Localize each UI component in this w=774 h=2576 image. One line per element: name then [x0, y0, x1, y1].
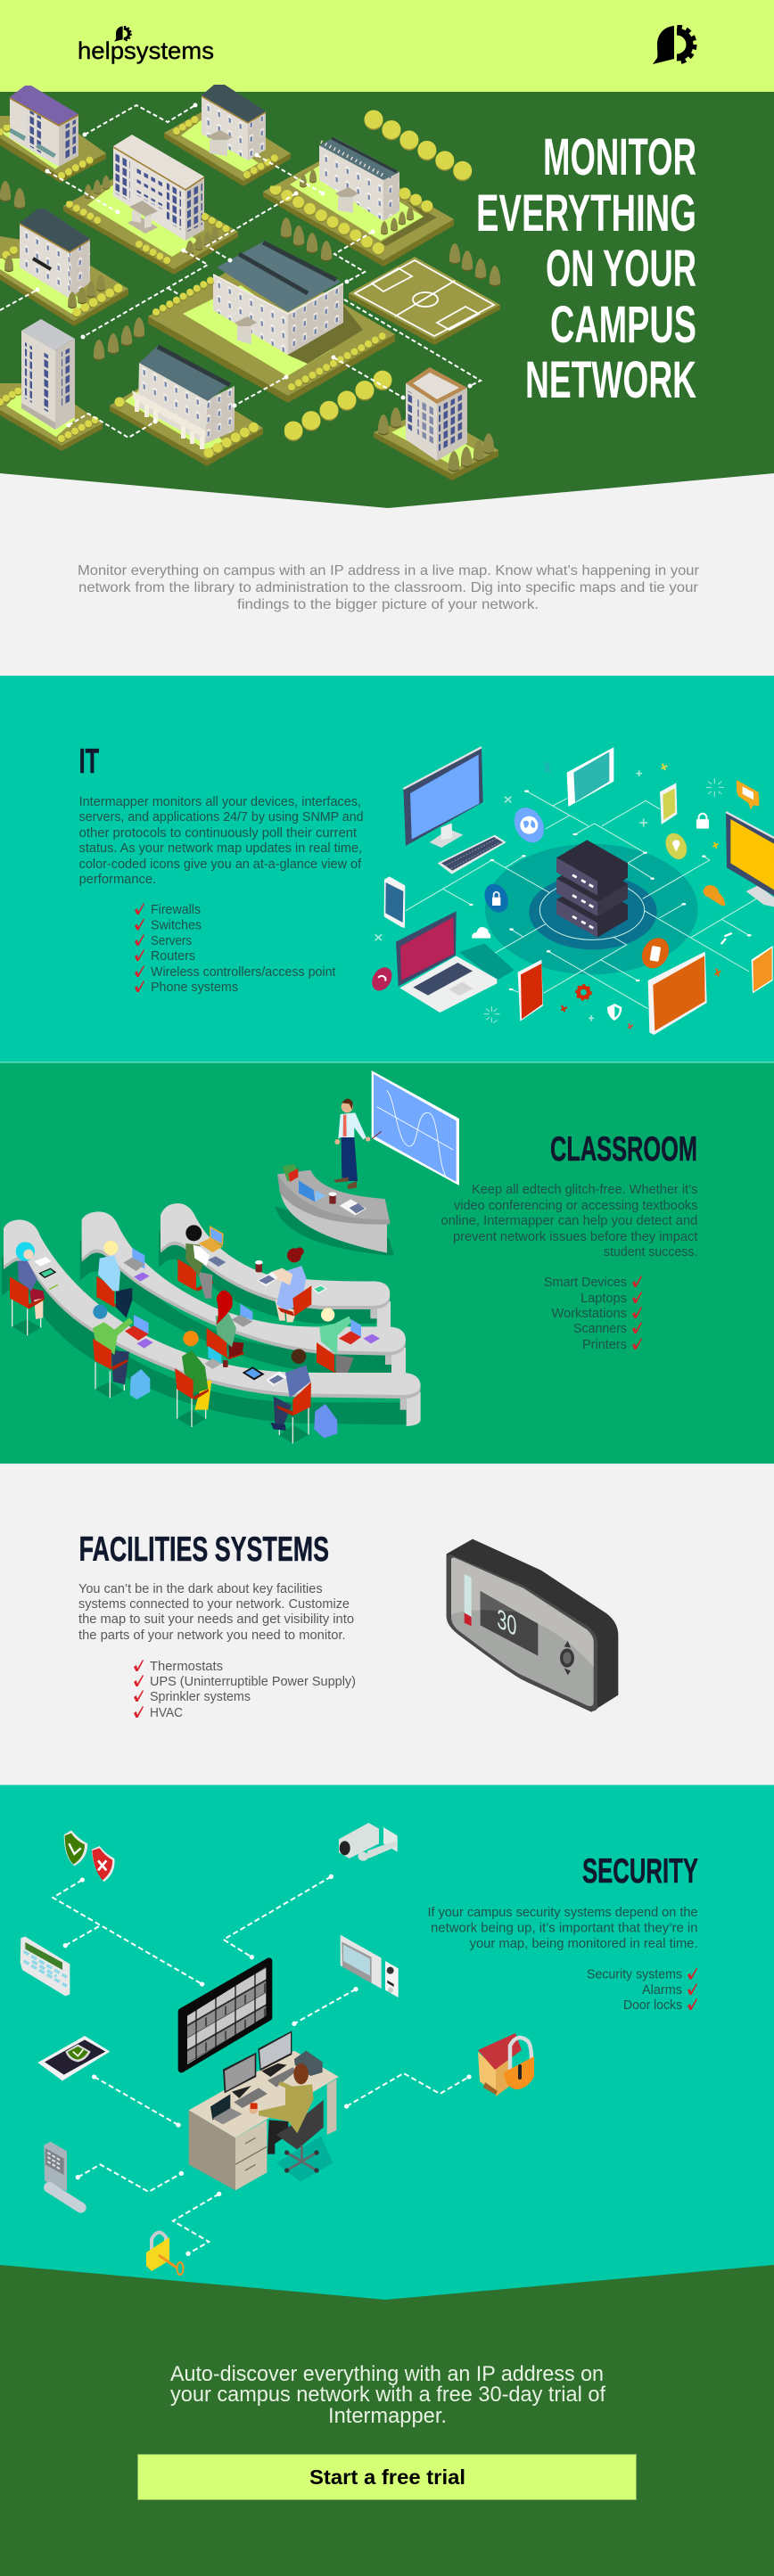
intro text: Monitor everything on campus with an IP address in a live map. Know what’s happening in your: [78, 563, 700, 578]
CTA text: Auto-discover everything with an IP address on: [170, 2362, 604, 2386]
blue monitor: [403, 747, 483, 848]
security checklist: Door locks: [623, 1998, 682, 2013]
trees: [0, 119, 500, 431]
red phone: [518, 960, 543, 1021]
IT checklist: Wireless controllers/access point: [151, 965, 335, 980]
facilities checklist: UPS (Uninterruptible Power Supply): [150, 1675, 356, 1689]
facilities checklist: [134, 1660, 356, 1720]
security operations illustration: [21, 1823, 469, 2253]
student: cyan hair: [10, 1242, 58, 1335]
icon: camera: [339, 1823, 398, 1861]
security checklist: Alarms: [642, 1983, 682, 1998]
icon: lock badge: [480, 880, 513, 916]
IT checklist: Phone systems: [151, 980, 238, 995]
teal tablet: [567, 747, 613, 807]
tower bottom-right: [374, 367, 498, 480]
classroom body text: [441, 1183, 697, 1259]
panel: facilities systems: [0, 1464, 774, 1784]
podium: [275, 1164, 394, 1255]
CTA text: [170, 2362, 605, 2428]
title: CAMPUS: [550, 296, 696, 354]
desk row: front: [2, 1219, 421, 1426]
classroom checklist: Smart Devices: [544, 1276, 627, 1290]
yellow monitor: [726, 812, 774, 907]
IT checklist: Servers: [151, 934, 192, 948]
hero campus illustration: [0, 85, 500, 480]
icon: map pin: [662, 830, 691, 863]
backpack: [130, 1369, 150, 1399]
backpack: [314, 1404, 337, 1438]
classroom checklist: Printers: [582, 1338, 627, 1352]
orange tablet: [648, 952, 707, 1035]
CTA button: Start a free trial: [309, 2465, 465, 2489]
icon: alarm keypad: [21, 1937, 70, 1996]
amber tablet: [752, 946, 773, 993]
IT checklist: Firewalls: [151, 903, 201, 917]
student: teal hair: [93, 1305, 153, 1398]
icon: intercom: [341, 1935, 399, 1998]
icon: shield: [607, 1004, 622, 1021]
logo: helpsystems: helpsystems: [78, 37, 214, 64]
facilities checklist: HVAC: [150, 1706, 183, 1720]
IT body text: status. As your network map updates in real time,: [79, 841, 362, 856]
facilities body text: the map to suit your needs and get visibility into: [78, 1612, 354, 1627]
icon: message: [737, 780, 759, 809]
facilities body text: You can’t be in the dark about key facilities: [78, 1582, 323, 1596]
classroom checklist: [544, 1276, 642, 1352]
icon: yellow padlock and key: [146, 2232, 184, 2275]
security body text: network being up, it’s important that they’re in: [431, 1922, 697, 1936]
icon: gear: [576, 985, 591, 1000]
icon: white cloud: [472, 927, 490, 939]
keyboard: [438, 835, 506, 874]
student: dark hair: [243, 1349, 311, 1443]
facilities body text: [78, 1582, 354, 1643]
lecture hall illustration: [2, 1071, 459, 1443]
IT checklist: [135, 903, 335, 995]
blue phone: [384, 876, 405, 928]
control button: [560, 1641, 574, 1675]
students: middle row: [96, 1241, 380, 1374]
panel: call to action: [0, 2265, 774, 2576]
student: orange hair: [175, 1331, 228, 1427]
security body text: [428, 1906, 698, 1951]
heading: security: SECURITY: [582, 1852, 698, 1891]
icon: house padlock: [478, 2033, 534, 2096]
facilities checklist: Sprinkler systems: [150, 1690, 251, 1704]
classroom body text: video conferencing or accessing textbooks: [454, 1199, 697, 1213]
IT body text: servers, and applications 24/7 by using SNMP and: [79, 810, 364, 824]
icon: small marks: [375, 762, 724, 1029]
building plot: colonnade hall: [110, 346, 263, 466]
IT checklist: Switches: [151, 918, 202, 932]
student: red long hair: [207, 1290, 252, 1359]
heading: classroom: CLASSROOM: [550, 1130, 697, 1169]
IT checklist: Routers: [151, 949, 195, 964]
security operator: [249, 2063, 324, 2170]
CTA text: Intermapper.: [328, 2404, 447, 2428]
desk: [189, 2051, 339, 2190]
desk shadow: [276, 2137, 333, 2182]
icon: chain link: [721, 933, 731, 943]
desk row: back: [159, 1203, 391, 1328]
video wall: [181, 1961, 269, 2070]
icon: door lock: [44, 2142, 81, 2208]
building plot: central main hall: [148, 241, 395, 403]
logo: helpsystems: [78, 26, 214, 64]
classroom checklist: Scanners: [573, 1322, 627, 1336]
IT body text: other protocols to continuously poll their current: [79, 826, 357, 841]
IT network illustration: [368, 747, 774, 1035]
security checklist: [587, 1968, 697, 2013]
heading: facilities: FACILITIES SYSTEMS: [79, 1530, 329, 1569]
student: blond: [96, 1241, 150, 1317]
facilities checklist: Thermostats: [150, 1660, 223, 1674]
building plot: left gabled hall: [0, 209, 128, 326]
laptop and keyboard: [210, 2067, 297, 2124]
students: back row: [177, 1225, 327, 1322]
student: pale hair: [317, 1308, 380, 1374]
desk row: middle: [80, 1211, 406, 1374]
panel: classroom: [0, 1062, 774, 1464]
network discs: [485, 844, 698, 974]
connection lines: [406, 792, 756, 1009]
student: red bun: [255, 1247, 327, 1322]
CTA text: your campus network with a free 30-day trial of: [170, 2383, 605, 2407]
classroom checklist: Workstations: [551, 1307, 627, 1321]
icon: globe: [508, 802, 550, 848]
security body text: your map, being monitored in real time.: [470, 1937, 698, 1951]
whiteboard: [372, 1071, 459, 1185]
classroom checklist: Laptops: [580, 1292, 627, 1306]
intro text: network from the library to administration to the classroom. Dig into specific maps and tie your: [78, 580, 699, 595]
desk monitors: [223, 2030, 292, 2098]
laptop: [396, 911, 515, 1013]
building plot: white office: [63, 135, 238, 275]
building plot: purple roof: [0, 86, 106, 183]
icon: orange cloud: [704, 885, 725, 906]
thermostat illustration: [447, 1539, 618, 1712]
intro text: [78, 563, 700, 612]
dashed links: [53, 1876, 469, 2253]
building plot: crenellated hall: [263, 137, 454, 267]
classroom body text: online, Intermapper can help you detect and: [441, 1214, 697, 1228]
panel: IT: [0, 676, 774, 1063]
server stack: [556, 840, 628, 938]
tower bottom-left: [0, 319, 103, 451]
classroom body text: prevent network issues before they impact: [453, 1230, 697, 1244]
soccer field: [349, 257, 500, 345]
students: front row: [10, 1242, 337, 1443]
heading: IT: IT: [79, 742, 99, 781]
storage box: [294, 2051, 323, 2076]
facilities body text: systems connected to your network. Customize: [78, 1597, 350, 1612]
icon: call badge: [368, 964, 396, 994]
icon: phone with shield: [37, 2036, 110, 2080]
CTA button: [137, 2455, 637, 2499]
icon: bubble and gear: [653, 26, 695, 64]
security body text: If your campus security systems depend on the: [428, 1906, 697, 1920]
panel: hero: [0, 85, 774, 508]
yellow phone: [660, 783, 677, 824]
icon: red shield: [92, 1846, 115, 1882]
facilities body text: the parts of your network you need to monitor.: [78, 1628, 346, 1643]
IT body text: Intermapper monitors all your devices, interfaces,: [79, 795, 361, 809]
student: black hair: [177, 1225, 226, 1299]
temperature display: 30: [497, 1603, 516, 1642]
classroom body text: Keep all edtech glitch-free. Whether it’s: [472, 1183, 697, 1197]
icon: green shield: [64, 1830, 87, 1866]
IT body text: performance.: [79, 873, 156, 887]
icon: white lock: [696, 814, 709, 829]
title: [476, 128, 696, 409]
intro text: findings to the bigger picture of your network.: [237, 597, 539, 612]
dashed network links: [0, 105, 481, 438]
panel: security: [0, 1784, 774, 2319]
security checklist: Security systems: [587, 1968, 682, 1982]
teacher: [333, 1099, 382, 1189]
building plot: slate gable top: [164, 85, 291, 186]
classroom body text: student success.: [604, 1245, 697, 1259]
icon: phone badge: [637, 933, 674, 973]
IT body text: color-coded icons give you an at-a-glance view of: [79, 857, 362, 872]
header band: [0, 0, 774, 92]
thermometer gauge: [465, 1574, 472, 1626]
IT body text: [79, 795, 364, 887]
temperature display: [481, 1591, 538, 1656]
